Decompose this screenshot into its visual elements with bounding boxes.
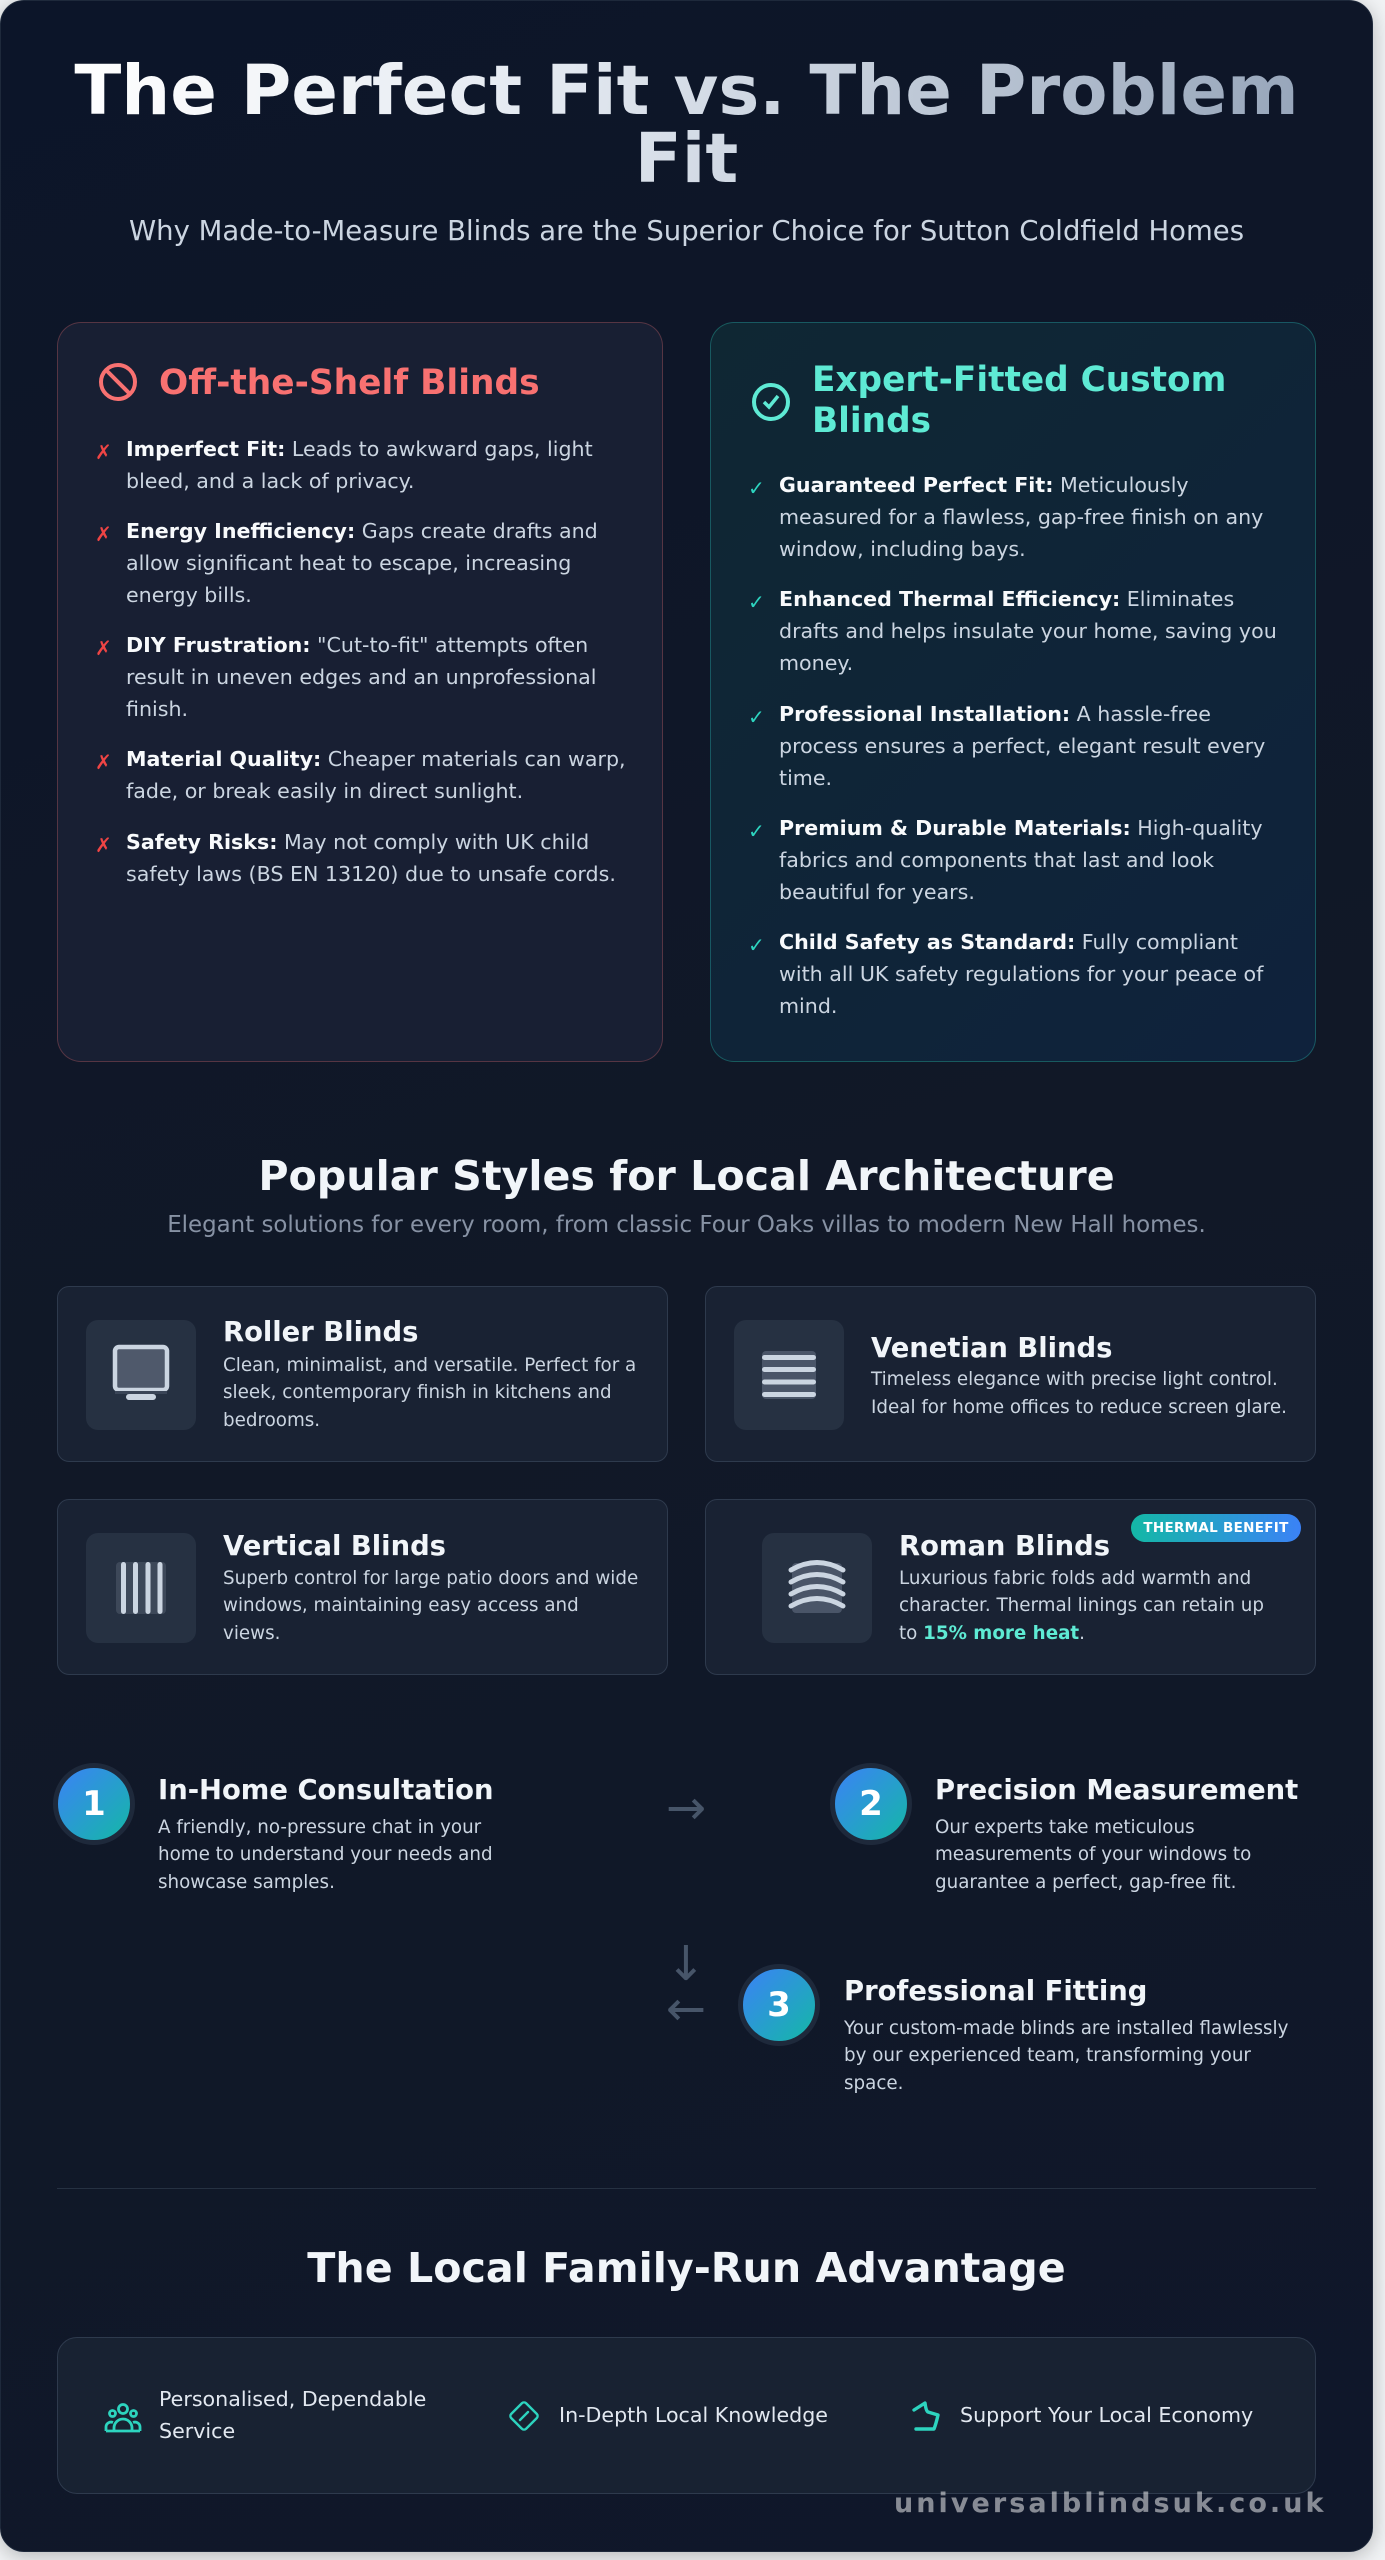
description: measurements of your windows to: [935, 1844, 1251, 1865]
number badge: 1: [82, 1784, 106, 1824]
heading: off-the-shelf: Off-the-Shelf Blinds: [159, 363, 540, 403]
list item: DIY frustration: DIY Frustration: "Cut-to-fit" attempts often: [126, 633, 588, 657]
card: roman blinds: [705, 1499, 1316, 1675]
description: bedrooms.: [223, 1410, 320, 1431]
panel: off-the-shelf blinds: [57, 322, 663, 1062]
list item: premium materials: fabrics and components that last and look: [779, 848, 1214, 872]
arrow: down: ↓: [666, 1936, 706, 1992]
list item: imperfect fit: Imperfect Fit: Leads to awkward gaps, light: [126, 437, 593, 461]
list item: energy inefficiency: ✗: [95, 522, 112, 546]
list item: energy inefficiency: allow significant heat to escape, increasing: [126, 551, 571, 575]
description: Our experts take meticulous: [935, 1816, 1195, 1838]
card: vertical blinds: [57, 1499, 668, 1675]
list item: energy inefficiency: [95, 519, 598, 607]
list item: DIY frustration: ✗: [95, 636, 112, 660]
arrow: left: ←: [666, 1981, 706, 2037]
label: local economy: Support Your Local Economy: [960, 2403, 1253, 2427]
label: personalised service: Service: [159, 2419, 235, 2443]
number badge: [53, 1763, 135, 1845]
step 2: precision measurement: [830, 1763, 1298, 1893]
description: Your custom-made blinds are installed flawlessly: [844, 2018, 1288, 2038]
description: space.: [844, 2073, 903, 2094]
description: home to understand your needs and: [158, 1844, 493, 1865]
number badge: 3: [767, 1985, 791, 2025]
description: guarantee a perfect, gap-free fit.: [935, 1872, 1236, 1893]
list item: DIY frustration: finish.: [126, 697, 188, 721]
badge: thermal benefit: [1131, 1514, 1301, 1542]
title: In-Home Consultation: [158, 1774, 493, 1806]
list item: material quality: Material Quality: Cheaper materials can warp,: [126, 747, 626, 771]
list item: imperfect fit: [95, 437, 593, 493]
description: [899, 1568, 1264, 1644]
heading: expert-fitted: [812, 360, 1226, 441]
description: character. Thermal linings can retain up: [899, 1595, 1264, 1616]
heading: expert-fitted: Expert-Fitted Custom: [812, 360, 1226, 400]
list item: guaranteed perfect fit: window, including bays.: [779, 537, 1026, 561]
description: Ideal for home offices to reduce screen glare.: [871, 1397, 1287, 1418]
title: The Perfect Fit vs. The Problem: [74, 51, 1299, 131]
list item: imperfect fit: ✗: [95, 440, 112, 464]
list item: safety risks: [95, 830, 616, 886]
description: A friendly, no-pressure chat in your: [158, 1816, 481, 1838]
list item: professional installation: [748, 702, 1265, 790]
list item: professional installation: Professional Installation: A hassle-free: [779, 702, 1211, 726]
step 1: in-home consultation: [53, 1763, 493, 1893]
icon: venetian blind: [734, 1320, 844, 1430]
description: by our experienced team, transforming your: [844, 2045, 1251, 2066]
card: roller blinds: [57, 1286, 668, 1462]
list item: safety risks: Safety Risks: May not comply with UK child: [126, 830, 589, 854]
list item: enhanced thermal efficiency: drafts and helps insulate your home, saving you: [779, 619, 1277, 643]
description: windows, maintaining easy access and: [223, 1595, 579, 1616]
icon: vertical blind: [86, 1533, 196, 1643]
list item: safety risks: safety laws (BS EN 13120) due to unsafe cords.: [126, 862, 616, 886]
icon: local knowledge diamond: [509, 2401, 539, 2431]
description: [935, 1816, 1251, 1893]
panel: advantages: [57, 2337, 1316, 2494]
card: venetian blinds: [705, 1286, 1316, 1462]
icon: prohibited: [99, 363, 137, 401]
list item: DIY frustration: result in uneven edges and an unprofessional: [126, 665, 597, 689]
panel: expert-fitted custom blinds: [710, 322, 1316, 1062]
description: [223, 1568, 638, 1644]
title: Vertical Blinds: [223, 1531, 446, 1562]
list item: premium materials: [748, 816, 1263, 904]
title: Venetian Blinds: [871, 1333, 1112, 1364]
step 3: professional fitting: [738, 1964, 1288, 2094]
title: Professional Fitting: [844, 1976, 1147, 2006]
description: Clean, minimalist, and versatile. Perfect for a: [223, 1354, 636, 1376]
list item: professional installation: time.: [779, 766, 832, 790]
list item: guaranteed perfect fit: Guaranteed Perfect Fit: Meticulously: [779, 473, 1189, 497]
number badge: [738, 1964, 820, 2046]
watermark: universalblindsuk.co.uk: [894, 2488, 1327, 2519]
title: Roman Blinds: [899, 1531, 1110, 1562]
list item: professional installation: process ensures a perfect, elegant result every: [779, 734, 1265, 758]
list item: child safety: Child Safety as Standard: Fully compliant: [779, 930, 1238, 954]
section heading: popular styles: Popular Styles for Local Architecture: [258, 1152, 1115, 1200]
list item: material quality: fade, or break easily in direct sunlight.: [126, 779, 523, 803]
list item: enhanced thermal efficiency: [748, 587, 1277, 675]
description: Timeless elegance with precise light control.: [871, 1369, 1278, 1390]
label: personalised service: [159, 2387, 426, 2443]
description: [223, 1354, 636, 1431]
list item: DIY frustration: [95, 633, 597, 721]
list item: energy inefficiency: Energy Inefficiency: Gaps create drafts and: [126, 519, 598, 543]
subtitle: Why Made-to-Measure Blinds are the Superior Choice for Sutton Coldfield Homes: [129, 215, 1244, 247]
list item: premium materials: Premium & Durable Materials: High-quality: [779, 816, 1263, 840]
icon: thumbs up: [912, 2401, 940, 2431]
number badge: [830, 1763, 912, 1845]
list item: imperfect fit: bleed, and a lack of privacy.: [126, 469, 414, 493]
description: showcase samples.: [158, 1872, 335, 1893]
description: [844, 2018, 1288, 2094]
label: local knowledge: In-Depth Local Knowledge: [559, 2403, 828, 2427]
list item: safety risks: ✗: [95, 833, 112, 857]
title: Fit: [635, 119, 738, 199]
list item: child safety: mind.: [779, 994, 837, 1018]
number badge: 2: [859, 1784, 883, 1824]
list item: child safety: with all UK safety regulations for your peace of: [779, 962, 1263, 986]
list item: child safety: [748, 930, 1264, 1018]
list item: child safety: ✓: [748, 933, 765, 957]
icon: roller blind: [86, 1320, 196, 1430]
description: Superb control for large patio doors and wide: [223, 1568, 638, 1588]
description: to 15% more heat.: [899, 1623, 1085, 1644]
description: [870, 1369, 1287, 1418]
heading: expert-fitted: Blinds: [812, 401, 931, 441]
list item: premium materials: ✓: [748, 819, 765, 843]
list item: guaranteed perfect fit: measured for a flawless, gap-free finish on any: [779, 505, 1263, 529]
icon: check circle: [752, 383, 790, 421]
list item: material quality: ✗: [95, 750, 112, 774]
list item: enhanced thermal efficiency: money.: [779, 651, 853, 675]
list item: material quality: [95, 747, 626, 803]
list item: energy inefficiency: energy bills.: [126, 583, 252, 607]
list item: guaranteed perfect fit: ✓: [748, 476, 765, 500]
description: sleek, contemporary finish in kitchens and: [223, 1382, 612, 1403]
description: views.: [223, 1623, 280, 1644]
badge: thermal benefit: THERMAL BENEFIT: [1143, 1520, 1289, 1536]
title: [57, 57, 1316, 193]
description: Luxurious fabric folds add warmth and: [899, 1568, 1251, 1588]
icon: roman blind: [762, 1533, 872, 1643]
list item: enhanced thermal efficiency: ✓: [748, 590, 765, 614]
section subheading: Elegant solutions for every room, from classic Four Oaks villas to modern New Hall homes.: [167, 1212, 1206, 1238]
list item: premium materials: beautiful for years.: [779, 880, 975, 904]
list item: professional installation: ✓: [748, 705, 765, 729]
title: Roller Blinds: [223, 1317, 418, 1348]
list item: enhanced thermal efficiency: Enhanced Thermal Efficiency: Eliminates: [779, 587, 1234, 611]
title: Precision Measurement: [935, 1774, 1298, 1806]
description: [158, 1816, 493, 1893]
label: personalised service: Personalised, Dependable: [159, 2387, 426, 2411]
icon: people: [104, 2403, 142, 2432]
list item: guaranteed perfect fit: [748, 473, 1263, 561]
section heading: local advantage: The Local Family-Run Advantage: [307, 2244, 1066, 2292]
arrow: right: →: [666, 1780, 706, 1836]
